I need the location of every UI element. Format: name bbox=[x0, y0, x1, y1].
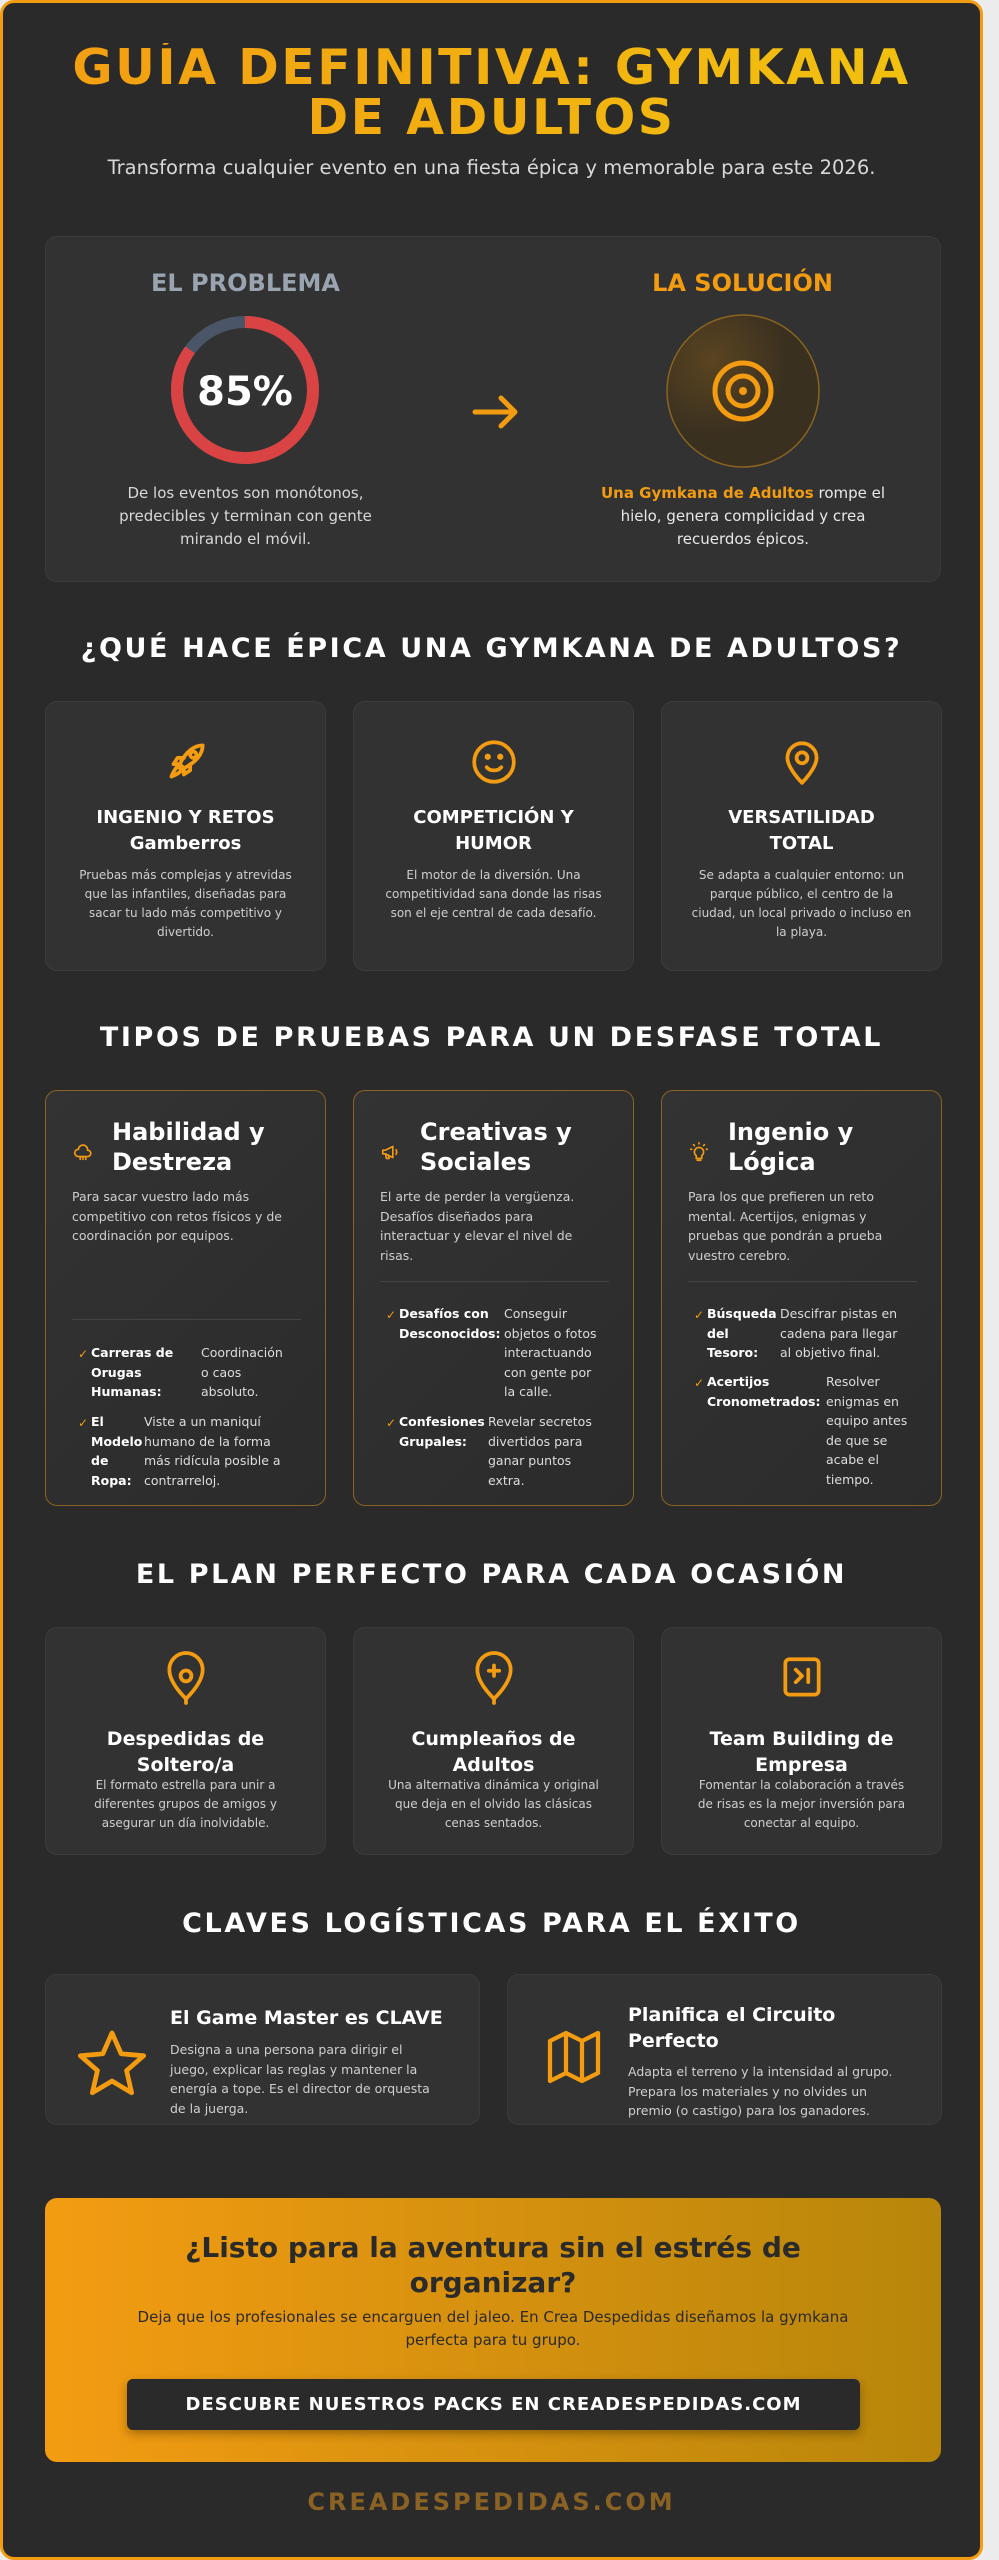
item: Humanas: bbox=[91, 1384, 162, 1399]
CTA button: DESCUBRE NUESTROS PACKS EN CREADESPEDIDAS.COM bbox=[186, 2394, 802, 2415]
card: creativas: Creativas y bbox=[420, 1118, 572, 1146]
card: habilidad: ✓ bbox=[78, 1416, 88, 1430]
icon: cloud bbox=[74, 1144, 92, 1160]
card: ingenio logica: Ingenio y bbox=[728, 1118, 853, 1146]
icon: balloon ring bbox=[167, 1651, 205, 1705]
item: Tesoro: bbox=[707, 1345, 758, 1360]
donut chart 85% bbox=[171, 316, 319, 464]
card: ingenio: Pruebas más complejas y atrevidas que las infantiles, diseñadas para sacar tu lado más competitivo y divertido. bbox=[79, 868, 292, 939]
card: despedidas: Despedidas de Soltero/a bbox=[107, 1728, 264, 1776]
card: creativas: extra. bbox=[488, 1472, 525, 1488]
card: circuito bbox=[507, 1974, 942, 2125]
item: Coordinación bbox=[201, 1345, 283, 1360]
card: despedidas: El formato estrella para unir a diferentes grupos de amigos y asegurar un día inolvidable. bbox=[94, 1778, 277, 1830]
card: team building: Fomentar la colaboración a través de risas es la mejor inversión para conectar al equipo. bbox=[698, 1778, 905, 1830]
card: game master bbox=[45, 1974, 480, 2125]
icon: target bbox=[666, 314, 820, 468]
card: ingenio logica: Para los que prefieren un reto mental. Acertijos, enigmas y pruebas que pondrán a prueba vuestro cerebro. bbox=[688, 1189, 882, 1262]
card: versatilidad: Se adapta a cualquier entorno: un parque público, el centro de la ciudad, un local privado o incluso en la playa. bbox=[692, 868, 911, 939]
panel: CTA bbox=[45, 2198, 941, 2462]
solution text: Una Gymkana de Adultos rompe el hielo, genera complicidad y crea recuerdos épicos. bbox=[601, 484, 885, 548]
card: habilidad: ✓ bbox=[78, 1347, 88, 1361]
problem text: De los eventos son monótonos, predecibles y terminan con gente mirando el móvil. bbox=[119, 484, 372, 548]
card: ingenio logica: Lógica bbox=[728, 1148, 816, 1176]
title bbox=[3, 43, 980, 143]
card: circuito: Planifica el Circuito bbox=[628, 2004, 835, 2026]
item: Conseguir bbox=[504, 1306, 567, 1321]
card: versatilidad bbox=[661, 701, 942, 971]
item: más ridícula posible a bbox=[144, 1453, 281, 1468]
card: habilidad: Para sacar vuestro lado más competitivo con retos físicos y de coordinación por equipos. bbox=[72, 1189, 282, 1243]
card: competicion: COMPETICIÓN Y HUMOR bbox=[413, 807, 574, 854]
card: circuito: Perfecto bbox=[628, 2030, 719, 2052]
item: divertidos para bbox=[488, 1434, 582, 1448]
item: Modelo bbox=[91, 1434, 142, 1448]
card: ingenio: INGENIO Y RETOS Gamberros bbox=[96, 807, 275, 854]
item: de que se bbox=[826, 1432, 887, 1448]
card: ingenio logica bbox=[661, 1090, 942, 1506]
item bbox=[694, 1306, 898, 1360]
item: Cronometrados: bbox=[707, 1394, 820, 1408]
heading: epic: ¿QUÉ HACE ÉPICA UNA GYMKANA DE ADULTOS? bbox=[81, 633, 902, 664]
subtitle: Transforma cualquier evento en una fiesta épica y memorable para este 2026. bbox=[108, 156, 875, 179]
title: GUÍA DEFINITIVA: GYMKANA bbox=[72, 39, 911, 96]
item: de bbox=[91, 1453, 108, 1468]
item: Resolver bbox=[826, 1374, 880, 1389]
item: enigmas en bbox=[826, 1394, 899, 1408]
card: creativas bbox=[353, 1090, 634, 1506]
card: circuito: Adapta el terreno y la intensidad al grupo. Prepara los materiales y no olvides un premio (o castigo) para los ganadores. bbox=[628, 2064, 892, 2118]
item: interactuando bbox=[504, 1345, 592, 1360]
arrow bbox=[472, 396, 518, 428]
icon: megaphone bbox=[382, 1146, 398, 1160]
CTA text: Deja que los profesionales se encarguen del jaleo. En Crea Despedidas diseñamos la gymkana perfecta para tu grupo. bbox=[138, 2308, 848, 2349]
card: habilidad: Habilidad y bbox=[112, 1118, 265, 1146]
item: acabe el bbox=[826, 1452, 879, 1467]
card: cumpleanos bbox=[353, 1627, 634, 1855]
solution heading: LA SOLUCIÓN bbox=[652, 269, 833, 297]
item: Viste a un maniquí bbox=[144, 1414, 261, 1429]
icon: smile bbox=[472, 740, 516, 784]
item bbox=[694, 1374, 907, 1486]
item: Desconocidos: bbox=[399, 1326, 500, 1340]
card: ingenio logica: ✓ bbox=[694, 1376, 704, 1390]
item: absoluto. bbox=[201, 1384, 258, 1399]
item: o caos bbox=[201, 1364, 241, 1380]
card: creativas: ✓ bbox=[386, 1308, 396, 1322]
card: cumpleanos: Una alternativa dinámica y original que deja en el olvido las clásicas cenas sentados. bbox=[388, 1778, 599, 1830]
item: El bbox=[91, 1414, 104, 1429]
card: team building bbox=[661, 1627, 942, 1855]
item bbox=[386, 1414, 592, 1488]
title: DE ADULTOS bbox=[307, 89, 676, 146]
item: Orugas bbox=[91, 1364, 142, 1380]
card: creativas: El arte de perder la vergüenza. Desafíos diseñados para interactuar y elevar el nivel de risas. bbox=[380, 1189, 574, 1262]
heading: plan: EL PLAN PERFECTO PARA CADA OCASIÓN bbox=[136, 1559, 847, 1590]
card: ingenio logica: ✓ bbox=[694, 1308, 704, 1322]
item: ganar puntos bbox=[488, 1453, 571, 1468]
card: creativas: ✓ bbox=[386, 1416, 396, 1430]
heading: tipos: TIPOS DE PRUEBAS PARA UN DESFASE TOTAL bbox=[100, 1022, 883, 1053]
item: Búsqueda bbox=[707, 1306, 777, 1321]
item: Acertijos bbox=[707, 1374, 769, 1389]
item: objetos o fotos bbox=[504, 1326, 597, 1340]
item: Revelar secretos bbox=[488, 1414, 592, 1429]
card: versatilidad: VERSATILIDAD TOTAL bbox=[728, 807, 875, 854]
card: game master: El Game Master es CLAVE bbox=[170, 2007, 443, 2029]
icon: map pin bbox=[786, 741, 818, 785]
card: habilidad: Destreza bbox=[112, 1148, 232, 1176]
icon: map bbox=[548, 2030, 600, 2084]
icon: balloon plus bbox=[475, 1651, 513, 1705]
problem heading: EL PROBLEMA bbox=[151, 269, 340, 297]
card: habilidad bbox=[45, 1090, 326, 1506]
item: Descifrar pistas en bbox=[780, 1306, 897, 1321]
card: creativas: Sociales bbox=[420, 1148, 531, 1176]
item: contrarreloj. bbox=[144, 1472, 220, 1488]
card: game master: Designa a una persona para dirigir el juego, explicar las reglas y mantener la energía a tope. Es el director de orquesta de la juerga. bbox=[170, 2042, 430, 2116]
card: competicion: El motor de la diversión. Una competitividad sana donde las risas son el eje central de cada desafío. bbox=[385, 868, 602, 920]
donut chart 85%: 85% bbox=[197, 369, 293, 415]
CTA title: ¿Listo para la aventura sin el estrés de organizar? bbox=[185, 2231, 801, 2299]
footer: CREADESPEDIDAS.COM bbox=[307, 2488, 676, 2516]
item: equipo antes bbox=[826, 1413, 907, 1428]
item: cadena para llegar bbox=[780, 1326, 897, 1340]
item: Ropa: bbox=[91, 1472, 132, 1488]
item bbox=[386, 1306, 597, 1399]
icon: box bbox=[783, 1657, 821, 1696]
panel: problem / solution bbox=[45, 236, 941, 582]
item: Confesiones bbox=[399, 1414, 485, 1429]
icon: star bbox=[78, 2030, 146, 2096]
item bbox=[78, 1345, 283, 1399]
item: al objetivo final. bbox=[780, 1345, 880, 1360]
item: humano de la forma bbox=[144, 1434, 271, 1448]
icon: rocket bbox=[170, 744, 204, 778]
item: la calle. bbox=[504, 1384, 552, 1399]
card: despedidas bbox=[45, 1627, 326, 1855]
item: Desafíos con bbox=[399, 1306, 489, 1321]
item bbox=[78, 1414, 281, 1488]
card: team building: Team Building de Empresa bbox=[710, 1728, 893, 1776]
item: Carreras de bbox=[91, 1345, 173, 1360]
item: con gente por bbox=[504, 1364, 591, 1380]
CTA button bbox=[127, 2379, 860, 2430]
card: competicion bbox=[353, 701, 634, 971]
heading: claves: CLAVES LOGÍSTICAS PARA EL ÉXITO bbox=[182, 1908, 801, 1939]
item: Grupales: bbox=[399, 1434, 467, 1448]
item: del bbox=[707, 1326, 729, 1340]
card: ingenio bbox=[45, 701, 326, 971]
icon: bulb bbox=[690, 1142, 708, 1162]
card: cumpleanos: Cumpleaños de Adultos bbox=[411, 1728, 576, 1776]
item: tiempo. bbox=[826, 1472, 874, 1486]
